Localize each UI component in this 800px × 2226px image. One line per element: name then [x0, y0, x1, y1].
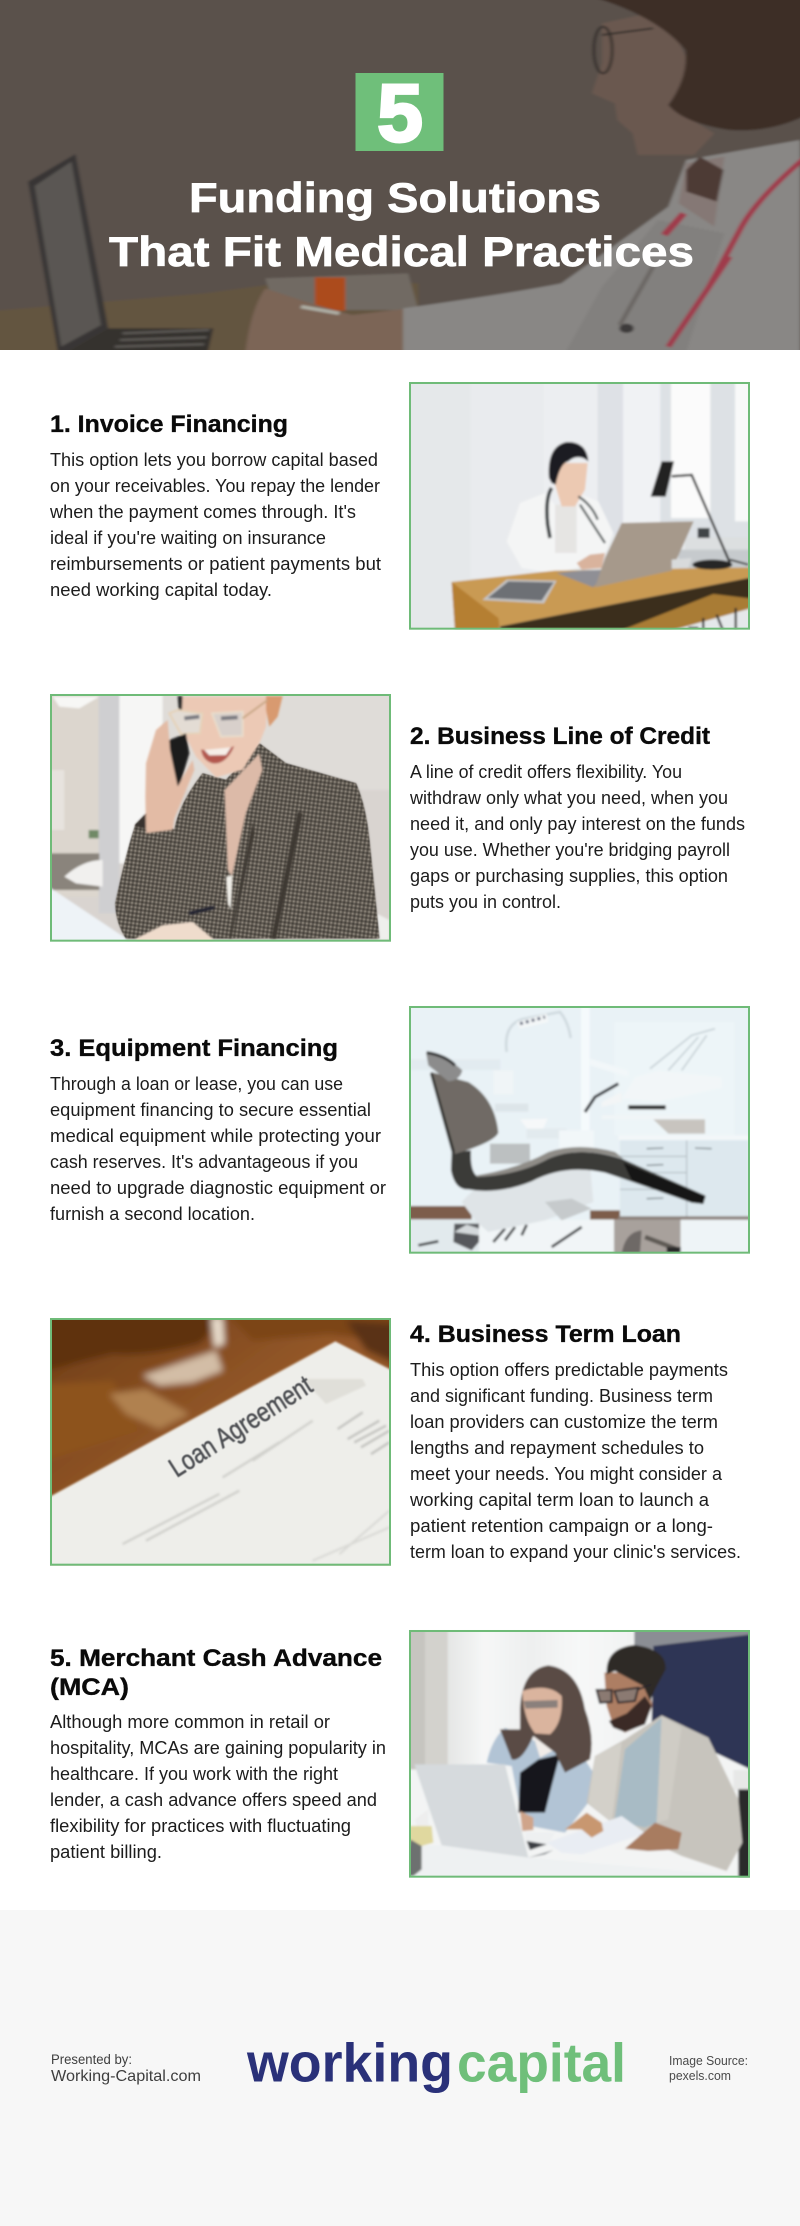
badge: number 5: [356, 68, 444, 159]
section 5: Merchant Cash Advance: [50, 1619, 762, 1886]
body text 4: lengths and repayment schedules to: [410, 1438, 704, 1458]
body text 4: and significant funding. Business term: [410, 1386, 713, 1406]
body text 1: ideal if you're waiting on insurance: [50, 528, 326, 548]
body text 5: lender, a cash advance offers speed and: [50, 1790, 377, 1810]
presented by credit: [51, 2052, 201, 2085]
photo 1: doctor at desk with laptop: [409, 382, 750, 630]
photo 2: woman on the phone: [50, 694, 391, 942]
body text 5: flexibility for practices with fluctuating: [50, 1816, 351, 1836]
body text 2: need it, and only pay interest on the funds: [410, 814, 745, 834]
body text 1: on your receivables. You repay the lender: [50, 476, 380, 496]
photo 4: loan agreement document: [50, 1318, 391, 1566]
body text 4: This option offers predictable payments: [410, 1360, 728, 1380]
header panel: [0, 0, 800, 360]
title: That Fit Medical Practices: [109, 228, 694, 275]
section 1: Invoice Financing: [49, 371, 762, 638]
body text 3: cash reserves. It's advantageous if you: [50, 1152, 358, 1172]
heading 2: 2. Business Line of Credit: [410, 723, 710, 750]
heading 5: 5. Merchant Cash Advance: [50, 1645, 382, 1672]
logo: workingcapital: working: [246, 2032, 453, 2094]
body text 3: Through a loan or lease, you can use: [50, 1074, 343, 1094]
section 3: Equipment Financing: [50, 995, 762, 1262]
header background photo: doctor at laptop: [0, 0, 800, 360]
body text 1: This option lets you borrow capital based: [50, 450, 378, 470]
photo 5: two colleagues at a laptop: [409, 1630, 750, 1878]
body text 3: furnish a second location.: [50, 1204, 255, 1224]
image source credit: Image Source:: [669, 2053, 748, 2068]
section 2: Business Line of Credit: [39, 683, 745, 950]
heading 5: [50, 1645, 382, 1701]
body text 5: healthcare. If you work with the right: [50, 1764, 338, 1784]
photo 3: dental chair: [409, 1006, 750, 1254]
logo: workingcapital: capital: [457, 2032, 626, 2094]
body text 2: puts you in control.: [410, 892, 561, 912]
body text 5: [50, 1712, 386, 1862]
body text 4: term loan to expand your clinic's services.: [410, 1542, 741, 1562]
body text 2: [409, 762, 745, 912]
body text 4: working capital term loan to launch a: [409, 1490, 710, 1510]
body text 1: [49, 450, 381, 600]
title: Funding Solutions: [189, 174, 601, 221]
body text 1: when the payment comes through. It's: [49, 502, 356, 522]
body text 4: patient retention campaign or a long-: [410, 1516, 713, 1536]
section 4: Business Term Loan: [39, 1307, 741, 1574]
logo: workingcapital: [246, 2032, 626, 2094]
body text 2: gaps or purchasing supplies, this option: [410, 866, 728, 886]
title: [109, 174, 694, 275]
body text 4: [409, 1360, 741, 1562]
presented by credit: Working-Capital.com: [51, 2068, 201, 2085]
footer panel: [0, 1910, 800, 2226]
body text 5: patient billing.: [50, 1842, 162, 1862]
body text 3: [50, 1074, 386, 1224]
body text 1: reimbursements or patient payments but: [50, 554, 381, 574]
heading 5: (MCA): [50, 1674, 129, 1701]
badge: number 5: 5: [377, 68, 423, 159]
body text 2: A line of credit offers flexibility. You: [410, 762, 682, 782]
image source credit: [669, 2053, 748, 2083]
heading 3: 3. Equipment Financing: [50, 1035, 338, 1062]
presented by credit: Presented by:: [51, 2052, 132, 2067]
body text 1: need working capital today.: [50, 580, 272, 600]
body text 2: you use. Whether you're bridging payroll: [410, 840, 730, 860]
body text 4: meet your needs. You might consider a: [410, 1464, 723, 1484]
body text 3: equipment financing to secure essential: [50, 1100, 371, 1120]
body text 3: medical equipment while protecting your: [50, 1126, 381, 1146]
heading 4: 4. Business Term Loan: [410, 1321, 681, 1348]
footer background: [0, 1910, 800, 2226]
heading 1: 1. Invoice Financing: [50, 411, 288, 438]
image source credit: pexels.com: [669, 2068, 731, 2083]
body text 3: need to upgrade diagnostic equipment or: [50, 1178, 386, 1198]
body text 5: Although more common in retail or: [50, 1712, 330, 1732]
document title in photo: Loan Agreement: [163, 1369, 318, 1483]
body text 5: hospitality, MCAs are gaining popularity in: [50, 1738, 386, 1758]
body text 2: withdraw only what you need, when you: [409, 788, 728, 808]
body text 4: loan providers can customize the term: [410, 1412, 718, 1432]
